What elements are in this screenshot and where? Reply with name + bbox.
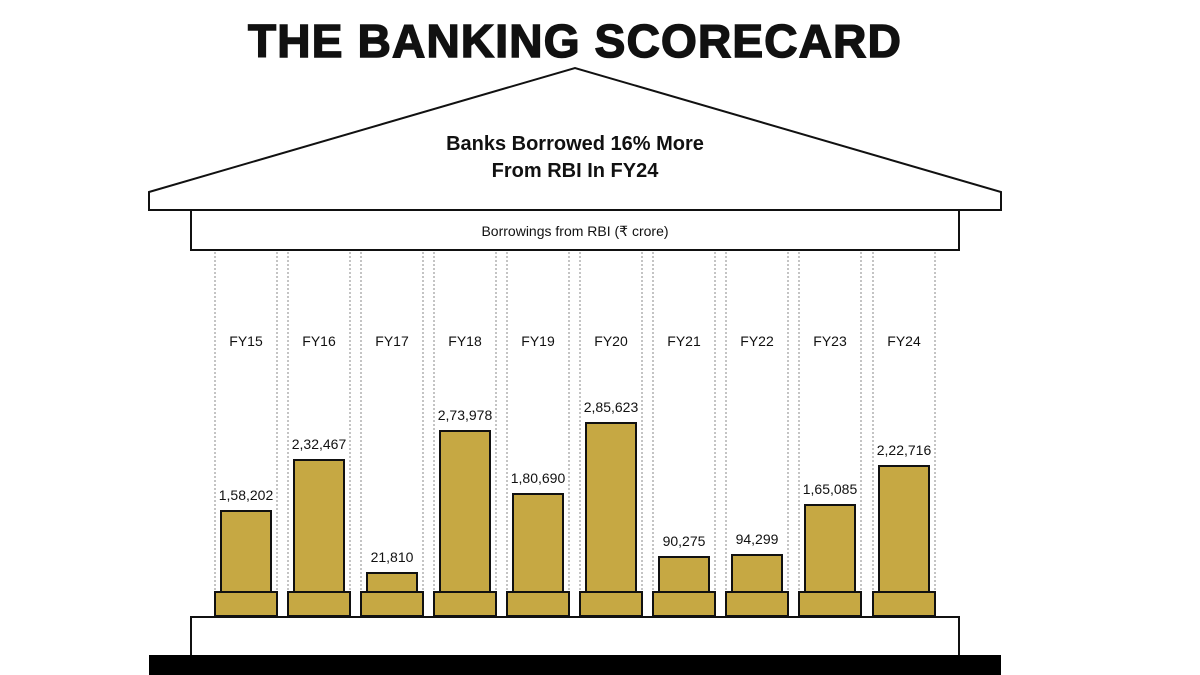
bar chart columns: FY19 [521, 333, 555, 349]
bar chart columns: FY15 [229, 333, 263, 349]
bar chart columns: 1,65,085 [803, 481, 857, 497]
roof [149, 68, 1001, 210]
bar chart columns: FY23 [813, 333, 847, 349]
ground [149, 655, 1001, 675]
bar chart columns: 2,73,978 [438, 407, 492, 423]
base platform [191, 617, 959, 656]
bar chart columns: FY20 [594, 333, 628, 349]
title: THE BANKING SCORECARD [248, 15, 902, 67]
bar chart columns: FY17 [375, 333, 409, 349]
bar chart columns: 1,80,690 [511, 470, 565, 486]
bar chart columns: 21,810 [371, 549, 414, 565]
bar chart columns: FY22 [740, 333, 774, 349]
bar chart columns: FY21 [667, 333, 701, 349]
bar chart columns [215, 252, 935, 616]
bar chart columns: FY24 [887, 333, 921, 349]
bar chart columns: 1,58,202 [219, 487, 273, 503]
bar chart columns: FY16 [302, 333, 336, 349]
architrave with subtitle [191, 210, 959, 250]
bar chart columns: FY18 [448, 333, 482, 349]
architrave with subtitle: Borrowings from RBI (₹ crore) [481, 223, 669, 239]
bar chart columns: 2,85,623 [584, 399, 638, 415]
roof heading line 2: From RBI In FY24 [492, 160, 659, 182]
bar chart columns: 94,299 [736, 531, 779, 547]
roof heading: Banks Borrowed 16% More [446, 133, 704, 155]
bar chart columns: 90,275 [663, 533, 706, 549]
bar chart columns: 2,22,716 [877, 442, 931, 458]
bar chart columns: 2,32,467 [292, 436, 346, 452]
